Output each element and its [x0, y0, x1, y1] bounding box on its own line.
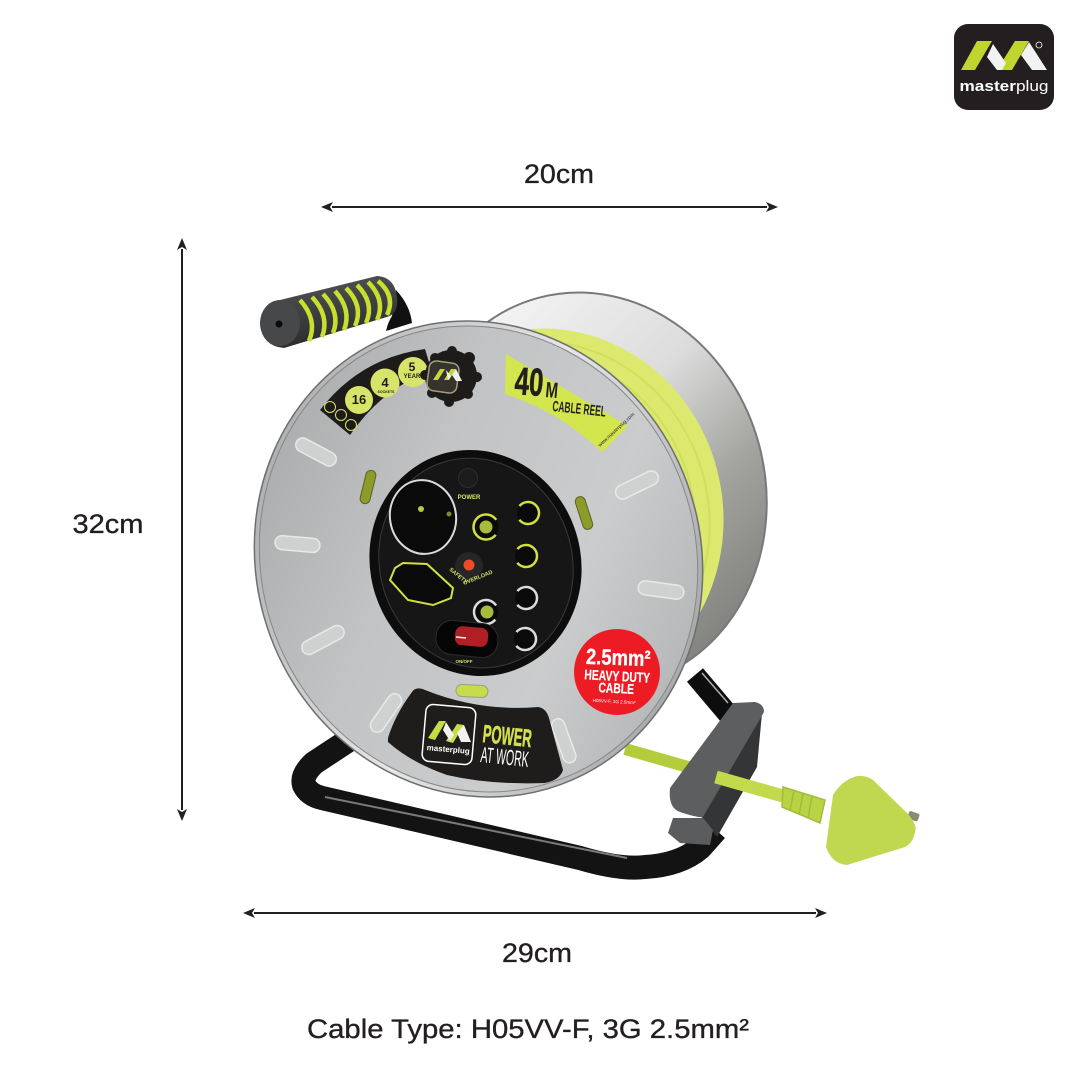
plug [826, 776, 920, 865]
yellow 40m cable reel label [505, 354, 636, 452]
brand logo: masterplug [954, 24, 1054, 110]
depth arrow: 29cm [254, 912, 816, 914]
height arrow: 32cm [181, 249, 183, 810]
power at work brand panel: masterplug [426, 743, 470, 756]
locking knob [420, 346, 482, 407]
feature badges strip: 4 [381, 375, 389, 390]
cable clip bracket [668, 702, 764, 845]
socket contact: lower [480, 606, 494, 618]
rear reel flange [369, 252, 811, 728]
mains cable: behind clip [625, 749, 695, 769]
power indicator: POWER [458, 495, 481, 501]
red heavy duty badge [574, 629, 660, 715]
yellow 40m cable reel label: CABLE REEL [552, 398, 607, 420]
width label: 20cm: 20cm [524, 159, 594, 189]
yellow 40m cable reel label: M [545, 377, 559, 403]
safety overload reset [448, 552, 494, 587]
central black socket panel [338, 420, 613, 706]
handle [260, 276, 412, 348]
strain relief [782, 787, 825, 823]
feature badges strip: YEAR [404, 374, 421, 380]
red heavy duty badge: H05VV-F, 3G 2.5mm² [593, 698, 636, 705]
on/off rocker switch: ON/OFF [456, 659, 473, 664]
red heavy duty badge: HEAVY DUTY [584, 667, 650, 686]
cable type caption: Cable Type: H05VV-F, 3G 2.5mm² [307, 1014, 749, 1044]
depth label: 29cm: 29cm [502, 938, 572, 968]
stand: tubular frame [303, 738, 716, 868]
power at work brand panel: AT WORK [479, 742, 530, 772]
feature badges strip: SOCKETS [378, 390, 395, 394]
power indicator [458, 468, 481, 501]
feature badges strip: 5 [409, 360, 416, 374]
stand: rear arm [695, 673, 728, 714]
flange embossed slots [274, 435, 685, 765]
large round socket [384, 475, 462, 559]
feature badges strip [320, 349, 432, 435]
white-ringed small sockets [469, 583, 541, 654]
width arrow: 20cm [332, 206, 767, 208]
power at work brand panel: POWER [481, 721, 533, 753]
safety overload reset: SAFETY [448, 567, 468, 586]
cable winding [338, 296, 758, 734]
red heavy duty badge: CABLE [598, 680, 634, 697]
mains cable: front [716, 777, 790, 798]
yellow-ringed small sockets [468, 498, 543, 571]
height label: 32cm: 32cm [72, 509, 144, 539]
feature badges strip: 16 [352, 392, 366, 407]
yellow 40m cable reel label: 40 [513, 360, 545, 405]
safety overload reset: OVERLOAD [463, 570, 494, 587]
power at work brand panel [388, 688, 563, 783]
hexagonal socket [390, 563, 453, 605]
on/off rocker switch [434, 619, 500, 664]
yellow 40m cable reel label: www.masterplug.com [597, 412, 636, 448]
front reel flange [188, 258, 769, 860]
socket contact: upper [480, 520, 492, 534]
brand logo: masterplug: master plug [960, 78, 1048, 95]
red heavy duty badge: 2.5mm² [586, 645, 651, 672]
flange cable windows [359, 469, 594, 698]
